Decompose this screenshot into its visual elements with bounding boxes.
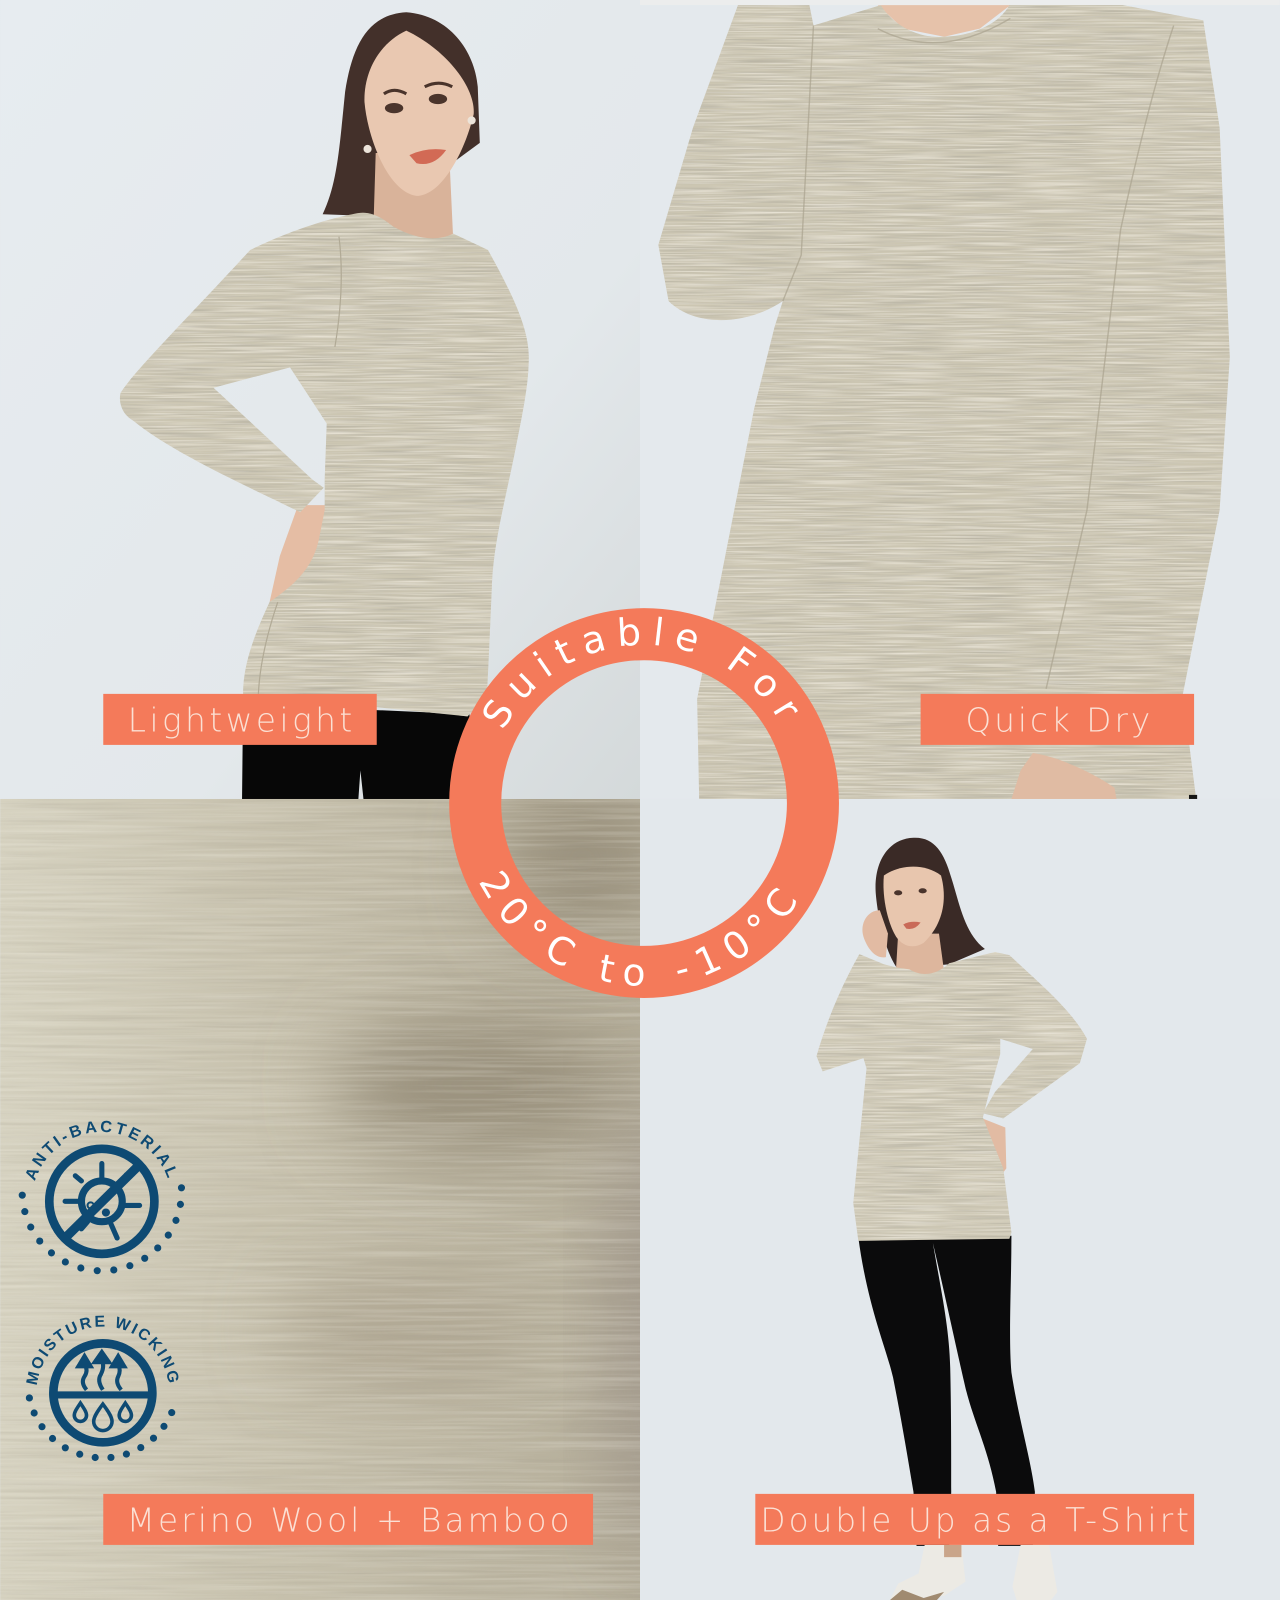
label: Quick Dry [921,694,1194,745]
model: neck [374,153,453,241]
model: raised hand [862,910,888,957]
prohibition slash [67,1166,139,1236]
dotted ring [22,1187,182,1271]
model: hand on hip [980,1117,1006,1184]
model: long-sleeve shirt body [658,5,1230,799]
badge: suitable for temperature ring [449,608,839,998]
model: facial features [894,888,927,929]
label: Lightweight: Lightweight [128,702,352,740]
panel: quick dry photo [640,0,1280,799]
label: Merino Wool + Bamboo: Merino Wool + Bamboo [127,1502,570,1540]
label: Quick Dry: Quick Dry [966,702,1150,740]
model: hand [1011,753,1117,799]
model: leggings [242,704,470,799]
icon: anti-bacterial badge [18,1120,185,1274]
model: left shoe [890,1545,966,1600]
label: Lightweight [103,694,377,745]
model: hand on hip [270,505,327,602]
icon: moisture wicking badge [26,1316,178,1462]
water drops [74,1403,131,1431]
ring text: Suitable For: Suitable For [483,616,798,728]
panel: fabric swatch [0,779,694,1600]
model: hair [876,838,985,969]
model: eyes and lips [363,83,476,164]
model: long-sleeve shirt [120,213,529,716]
icon label text: MOISTURE WICKING [26,1316,178,1385]
ring text: temperature range: 20°C to -10°C [480,870,796,986]
panel: lightweight photo [0,0,640,799]
model: right shoe [1012,1545,1057,1600]
icon label text: ANTI-BACTERIAL [26,1120,176,1181]
model: neck skin [878,5,1010,37]
model: neck [896,934,944,978]
model: leggings [858,1236,1035,1546]
label: Double Up as a T-Shirt: Double Up as a T-Shirt [760,1502,1189,1540]
virus glyph [65,1164,140,1238]
model: face [883,867,944,946]
model: hair [323,12,480,216]
model: long-sleeve shirt [817,952,1087,1241]
dotted ring [29,1398,176,1458]
model: face [364,31,474,196]
label: Merino Wool + Bamboo [103,1494,593,1545]
panel: double up as t-shirt photo [640,799,1280,1600]
rising arrows [78,1352,124,1390]
sleeve seams [783,18,1174,689]
